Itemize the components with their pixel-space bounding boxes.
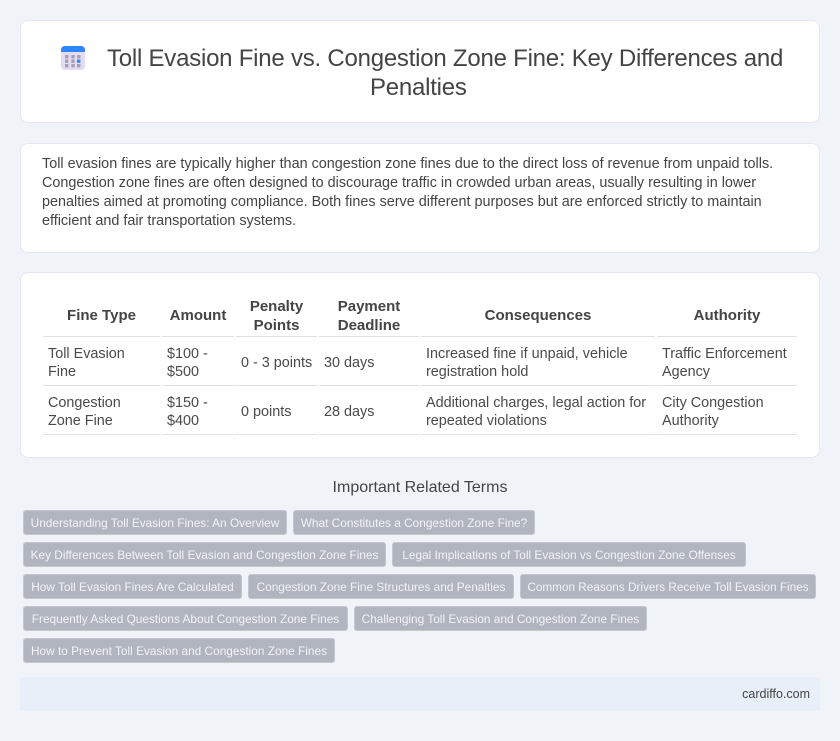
title: Penalties bbox=[370, 74, 467, 101]
text block: summary: penalties aimed at promoting compliance. Both fines serve different purposes but are enforced strictly to maintain bbox=[42, 194, 762, 210]
tag bbox=[248, 574, 514, 599]
tag bbox=[23, 606, 348, 631]
tag bbox=[23, 510, 287, 535]
tag bbox=[23, 542, 386, 567]
tag: How to Prevent Toll Evasion and Congestion Zone Fines bbox=[31, 644, 327, 658]
tag: Understanding Toll Evasion Fines: An Overview bbox=[31, 516, 279, 530]
row: congestion zone fine: Zone Fine bbox=[48, 413, 113, 429]
tag bbox=[354, 606, 647, 631]
row: toll evasion fine: $100 - bbox=[167, 346, 208, 362]
row: congestion zone fine: Authority bbox=[662, 413, 719, 429]
row: toll evasion fine: Increased fine if unpaid, vehicle bbox=[426, 346, 628, 362]
row: toll evasion fine: registration hold bbox=[426, 364, 528, 380]
row: toll evasion fine: Fine bbox=[48, 364, 76, 380]
row: congestion zone fine: $150 - bbox=[167, 395, 208, 411]
text block: summary: Congestion zone fines are often designed to discourage traffic in crowded urban areas, usually resulting in lower bbox=[42, 175, 756, 191]
panel: summary paragraph bbox=[20, 143, 820, 253]
panel: title card bbox=[20, 20, 820, 123]
tag bbox=[293, 510, 535, 535]
tag: Legal Implications of Toll Evasion vs Congestion Zone Offenses bbox=[402, 548, 736, 562]
tag: Frequently Asked Questions About Congestion Zone Fines bbox=[32, 612, 339, 626]
tag: Key Differences Between Toll Evasion and Congestion Zone Fines bbox=[31, 548, 378, 562]
row: toll evasion fine: 0 - 3 points bbox=[241, 355, 312, 371]
title bbox=[107, 45, 783, 101]
table header: Consequences bbox=[485, 307, 591, 324]
table header bbox=[67, 298, 760, 334]
panel: comparison table bbox=[20, 272, 820, 458]
tag: Challenging Toll Evasion and Congestion Zone Fines bbox=[362, 612, 639, 626]
row: congestion zone fine: 28 days bbox=[324, 404, 374, 420]
row: toll evasion fine: Toll Evasion bbox=[48, 346, 125, 362]
table header: Fine Type bbox=[67, 307, 136, 324]
table: fine comparison bbox=[43, 298, 797, 435]
row: congestion zone fine: $400 bbox=[167, 413, 199, 429]
tag bbox=[23, 574, 242, 599]
table header: Points bbox=[254, 317, 299, 334]
tag list: related terms bbox=[23, 510, 816, 663]
row: congestion zone fine: City Congestion bbox=[662, 395, 764, 411]
row: toll evasion fine bbox=[48, 346, 787, 380]
icon: calendar bbox=[61, 46, 85, 70]
tag: Congestion Zone Fine Structures and Penalties bbox=[257, 580, 505, 594]
tag: Common Reasons Drivers Receive Toll Evasion Fines bbox=[527, 581, 809, 594]
table header: Deadline bbox=[338, 317, 400, 334]
row: toll evasion fine: Agency bbox=[662, 364, 710, 380]
row: toll evasion fine: 30 days bbox=[324, 355, 374, 371]
heading: related terms: Important Related Terms bbox=[333, 479, 507, 496]
row: congestion zone fine: Additional charges, legal action for bbox=[426, 395, 646, 411]
text block: summary: efficient and fair transportation systems. bbox=[42, 213, 296, 229]
table header: Authority bbox=[694, 307, 760, 324]
row: congestion zone fine: repeated violations bbox=[426, 413, 547, 429]
row: congestion zone fine: 0 points bbox=[241, 404, 291, 420]
text block: summary: Toll evasion fines are typically higher than congestion zone fines due to the direct loss of revenue from unpaid tolls. bbox=[42, 156, 773, 172]
footer bar bbox=[20, 677, 820, 711]
tag bbox=[520, 574, 816, 599]
row: toll evasion fine: Traffic Enforcement bbox=[662, 346, 787, 362]
footer: site name: cardiffo.com bbox=[742, 687, 810, 701]
table header: Payment bbox=[338, 298, 400, 315]
table header: Amount bbox=[170, 307, 226, 324]
title: Toll Evasion Fine vs. Congestion Zone Fine: Key Differences and bbox=[107, 45, 783, 72]
row: toll evasion fine: $500 bbox=[167, 364, 199, 380]
tag: What Constitutes a Congestion Zone Fine? bbox=[301, 516, 527, 530]
tag bbox=[23, 638, 335, 663]
table header: Penalty bbox=[250, 298, 303, 315]
tag: How Toll Evasion Fines Are Calculated bbox=[31, 580, 234, 594]
tag bbox=[392, 542, 746, 567]
row: congestion zone fine: Congestion bbox=[48, 395, 121, 411]
text block: summary bbox=[42, 156, 773, 229]
row: congestion zone fine bbox=[48, 395, 764, 429]
